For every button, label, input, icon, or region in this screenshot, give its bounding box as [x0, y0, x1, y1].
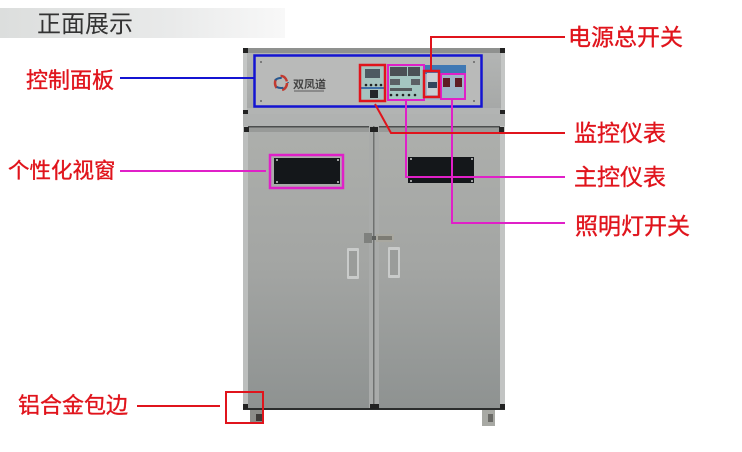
callout: main control meter: 主控仪表 [574, 164, 666, 190]
callout: lighting switch [441, 74, 690, 239]
callout: monitoring meter: 监控仪表 [574, 120, 666, 146]
callout: main control meter [388, 65, 666, 190]
cabinet doors [243, 114, 505, 410]
instrument panels [360, 65, 466, 100]
callout: control panel [26, 56, 482, 106]
callout: personalised window [8, 155, 343, 188]
caster: left [250, 410, 262, 424]
viewing window: right [408, 157, 474, 183]
cabinet [243, 48, 505, 426]
viewing window: left [274, 158, 340, 184]
callout: main power switch: 电源总开关 [568, 24, 683, 50]
caster: right [482, 410, 495, 426]
control box housing [243, 48, 505, 115]
callout: personalised window: 个性化视窗 [8, 159, 116, 183]
callout: aluminium edging [18, 392, 263, 423]
callout: monitoring meter [360, 65, 666, 146]
callout: aluminium edging: 铝合金包边 [18, 393, 128, 418]
section heading band [0, 8, 285, 38]
door latch [364, 233, 394, 243]
brand logo [274, 76, 326, 92]
callout: main power switch [424, 24, 683, 97]
callout: lighting switch: 照明灯开关 [575, 213, 690, 239]
callout: control panel: 控制面板 [26, 68, 114, 93]
door handle: left [347, 248, 359, 279]
section heading band: 正面展示 [37, 11, 133, 38]
door handle: right [388, 247, 400, 278]
brand logo: 双凤道 [293, 77, 326, 91]
control panel face [255, 56, 481, 106]
